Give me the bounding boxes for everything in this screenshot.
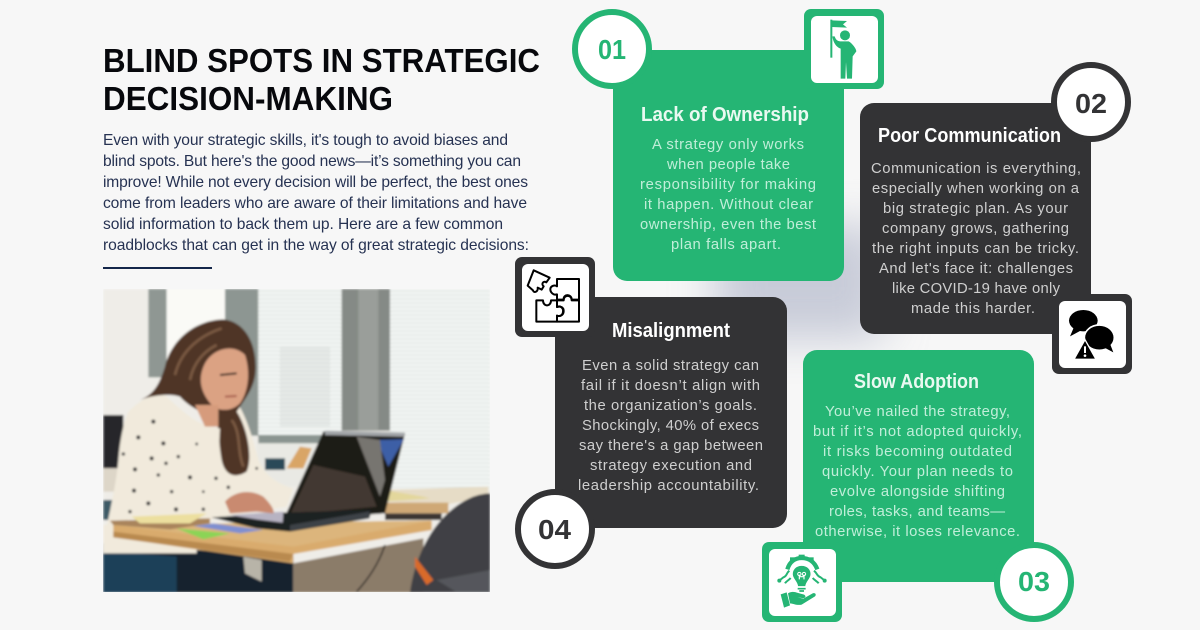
body text: plan falls apart. <box>671 237 781 253</box>
body text: strategy execution and <box>590 458 752 474</box>
body text: it happen. Without clear <box>644 197 813 213</box>
icon: person holding flag <box>804 9 884 89</box>
body text: Communication is everything, <box>871 161 1081 177</box>
badge 03 <box>997 545 1071 619</box>
badge 04: 04 <box>538 514 571 545</box>
badge 02: 02 <box>1075 88 1107 119</box>
intro paragraph <box>103 132 529 254</box>
badge 04 <box>518 492 592 566</box>
body text: like COVID-19 have only <box>892 281 1061 297</box>
body text <box>813 404 1022 540</box>
body text: responsibility for making <box>640 177 816 193</box>
intro paragraph: Even with your strategic skills, it's tough to avoid biases and <box>103 132 508 149</box>
badge 01: 01 <box>598 34 626 65</box>
body text: A strategy only works <box>652 137 804 153</box>
panel 03: slow adoption <box>762 350 1071 622</box>
body text: fail if it doesn’t align with <box>581 378 760 394</box>
badge 01 <box>575 12 649 86</box>
heading: Slow Adoption <box>854 371 979 393</box>
intro paragraph: come from leaders who are aware of their limitations and have <box>103 195 527 212</box>
heading: Poor Communication <box>878 125 1061 147</box>
body text: quickly. Your plan needs to <box>822 464 1013 480</box>
body text: made this harder. <box>911 301 1035 317</box>
body text <box>640 137 816 253</box>
body text: And let's face it: challenges <box>879 261 1073 277</box>
soft shadow behind cards <box>715 225 885 340</box>
body text: Shockingly, 40% of execs <box>582 418 759 434</box>
title <box>103 42 540 117</box>
title: DECISION-MAKING <box>103 80 393 117</box>
icon: speech bubbles with warning <box>1052 294 1132 374</box>
heading: Misalignment <box>612 320 730 342</box>
panel 02: poor communication <box>860 65 1132 374</box>
intro paragraph: solid information to back them up. Here are a few common <box>103 216 503 233</box>
body text: say there's a gap between <box>579 438 763 454</box>
accent rule <box>103 267 212 269</box>
body text: when people take <box>666 157 790 173</box>
intro paragraph: improve! While not every decision will be perfect, the best ones <box>103 174 528 191</box>
body text: the right inputs can be tricky. <box>872 241 1079 257</box>
body text: but if it’s not adopted quickly, <box>813 424 1022 440</box>
icon: lightbulb gear and hand <box>762 542 842 622</box>
body text: especially when working on a <box>872 181 1080 197</box>
heading: Lack of Ownership <box>641 104 809 126</box>
body text: You’ve nailed the strategy, <box>825 404 1010 420</box>
body text: company grows, gathering <box>882 221 1069 237</box>
panel 01: lack of ownership <box>575 9 884 281</box>
body text: roles, tasks, and teams— <box>829 504 1005 520</box>
badge 03: 03 <box>1018 566 1050 597</box>
body text: otherwise, it loses relevance. <box>815 524 1020 540</box>
body text: leadership accountability. <box>578 478 759 494</box>
body text: evolve alongside shifting <box>830 484 1005 500</box>
body text: it risks becoming outdated <box>823 444 1012 460</box>
body text: ownership, even the best <box>640 217 816 233</box>
intro paragraph: roadblocks that can get in the way of great strategic decisions: <box>103 237 529 254</box>
body text <box>578 358 763 494</box>
badge 02 <box>1054 65 1128 139</box>
body text <box>871 161 1081 317</box>
panel 04: misalignment <box>515 257 787 566</box>
body text: Even a solid strategy can <box>582 358 759 374</box>
body text: big strategic plan. As your <box>883 201 1068 217</box>
title: BLIND SPOTS IN STRATEGIC <box>103 42 540 79</box>
intro paragraph: blind spots. But here's the good news—it’s something you can <box>103 153 521 170</box>
body text: the organization’s goals. <box>584 398 757 414</box>
icon: puzzle pieces <box>515 257 595 337</box>
photo: woman working on a laptop <box>103 289 490 592</box>
